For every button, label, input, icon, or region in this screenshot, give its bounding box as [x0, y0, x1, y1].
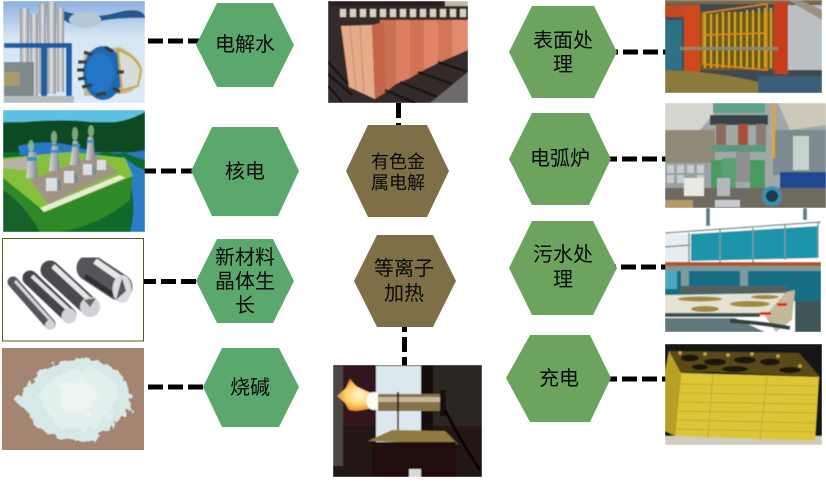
connector: nuclear [141, 168, 195, 174]
connector: arc furnace [602, 156, 668, 162]
photo: arc furnace workshop [665, 103, 826, 208]
hexagon: nonferrous metal electrolysis: 属电解 [371, 173, 425, 193]
connector: charging [602, 376, 668, 382]
connector: crystal growth [141, 279, 200, 284]
photo: wastewater treatment tank [665, 208, 821, 332]
hexagon: plasma heating: 等离子 [374, 257, 434, 280]
connector: surface treatment [603, 50, 668, 54]
connector: wastewater [601, 264, 668, 270]
hexagon: electrolysis of water [196, 3, 294, 87]
hexagon: electrolysis of water: 电解水 [215, 33, 275, 56]
hexagon: nuclear power: 核电 [225, 160, 265, 183]
hexagon: new material crystal growth: 新材料 [215, 246, 275, 269]
hexagon: charging [506, 335, 611, 422]
connector: caustic soda [148, 384, 206, 390]
hexagon: new material crystal growth: 晶体生 [215, 270, 275, 293]
hexagon: surface treatment [509, 6, 617, 98]
photo: copper cathode plates [328, 1, 468, 103]
hexagon: nonferrous metal electrolysis [346, 125, 449, 217]
connector: nonferrous electrolysis [396, 103, 401, 128]
photo: yellow battery stack [665, 344, 822, 445]
photo: plasma torch flame [333, 365, 482, 477]
hexagon: arc furnace [509, 113, 611, 205]
hexagon: new material crystal growth: 长 [235, 294, 255, 317]
hexagon: charging: 充电 [539, 367, 579, 390]
hexagon: wastewater treatment: 污水处 [533, 243, 593, 266]
hexagon: caustic soda: 烧碱 [230, 376, 270, 399]
hexagon: plasma heating: 加热 [384, 282, 424, 305]
photo: caustic soda flakes [2, 348, 144, 450]
hexagon: plasma heating [354, 235, 456, 327]
photo: surface treatment line [665, 0, 822, 93]
connector: plasma heating [402, 317, 407, 368]
hexagon: new material crystal growth [196, 239, 294, 323]
hexagon: wastewater treatment [509, 221, 617, 315]
hexagon: nonferrous metal electrolysis: 有色金 [371, 152, 425, 172]
photo: crystal rods [2, 238, 144, 341]
connector: electrolysis [148, 38, 200, 44]
hexagon: surface treatment: 理 [553, 54, 573, 76]
photo: electrolyser equipment [3, 1, 145, 103]
hexagon: nuclear power [191, 127, 299, 216]
hexagon: arc furnace: 电弧炉 [530, 147, 590, 170]
hexagon: wastewater treatment: 理 [553, 269, 573, 291]
hexagon: caustic soda [203, 348, 299, 427]
hexagon: surface treatment: 表面处 [533, 29, 593, 52]
photo: nuclear power plant [3, 110, 145, 232]
